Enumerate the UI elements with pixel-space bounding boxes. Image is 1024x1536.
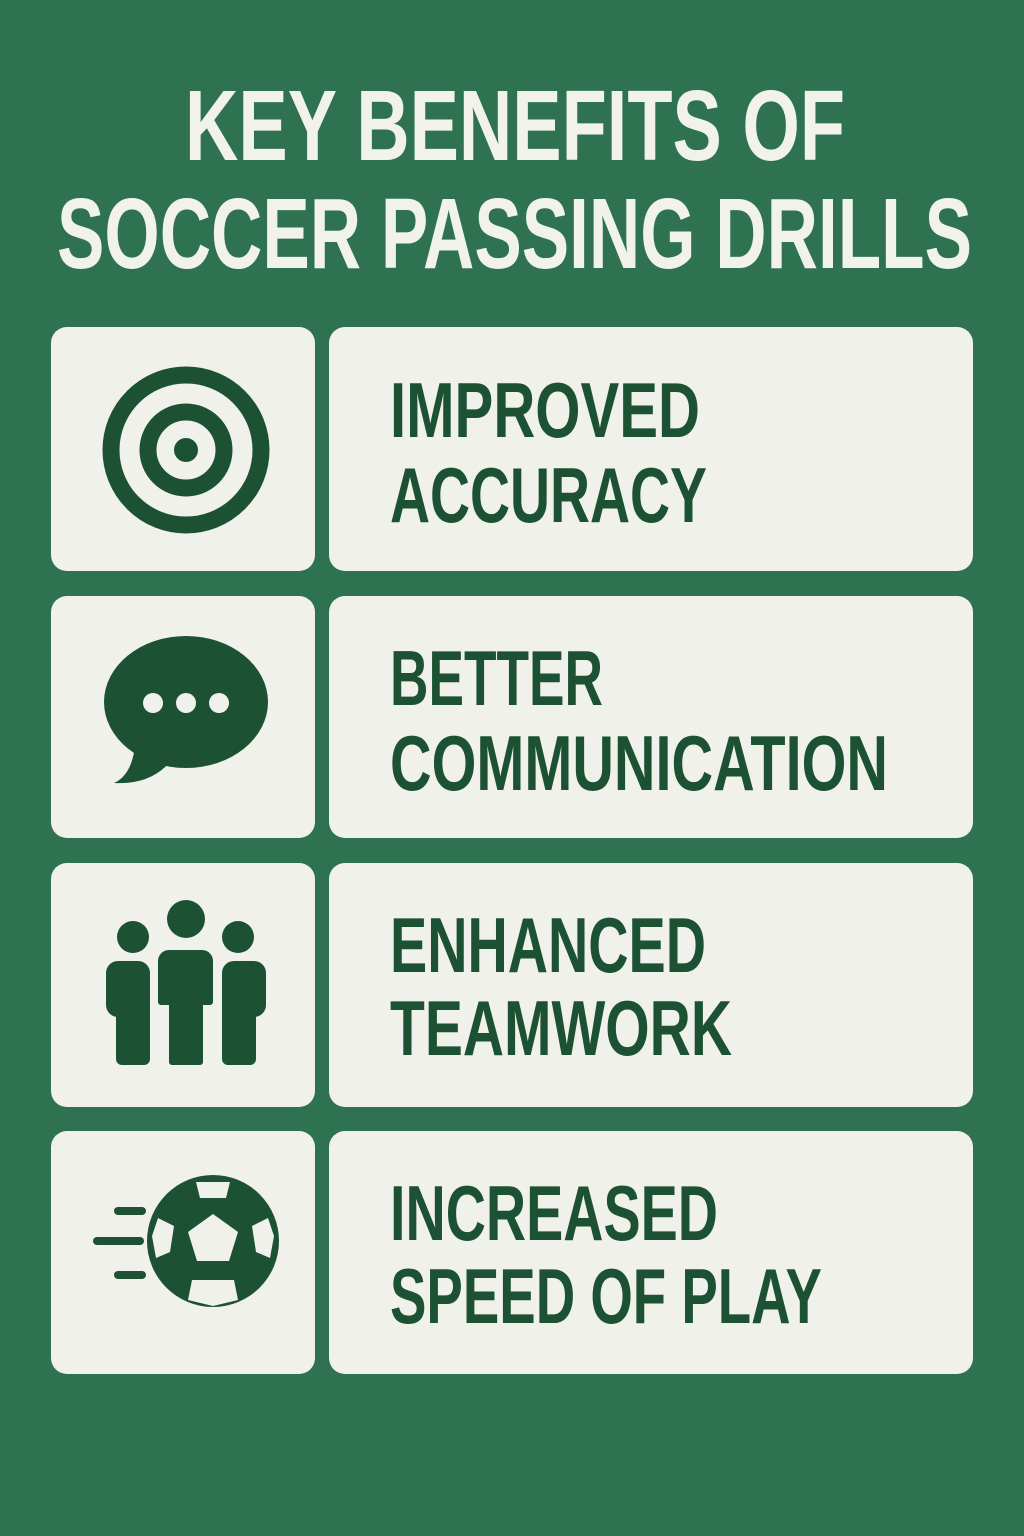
panel: increased speed of play [51,1131,973,1374]
text: improved accuracy: IMPROVED [390,366,700,454]
text: increased speed of play: INCREASED [390,1169,718,1257]
icon: soccer ball with speed lines [97,1175,279,1307]
text: better communication [390,634,888,807]
panel: improved accuracy [51,327,973,571]
title [57,70,972,290]
text: better communication: BETTER [390,634,603,722]
panel: enhanced teamwork [51,863,973,1107]
text: increased speed of play [390,1169,822,1340]
panel: better communication [51,596,973,838]
text: increased speed of play: SPEED OF PLAY [390,1252,822,1340]
icon: speech bubble [104,636,268,783]
icon: team [106,900,266,1068]
text: enhanced teamwork: TEAMWORK [390,984,732,1072]
text: enhanced teamwork: ENHANCED [390,901,706,989]
text: improved accuracy [390,366,707,539]
icon: target [111,375,261,525]
text: improved accuracy: ACCURACY [390,451,707,539]
text: enhanced teamwork [390,901,732,1072]
